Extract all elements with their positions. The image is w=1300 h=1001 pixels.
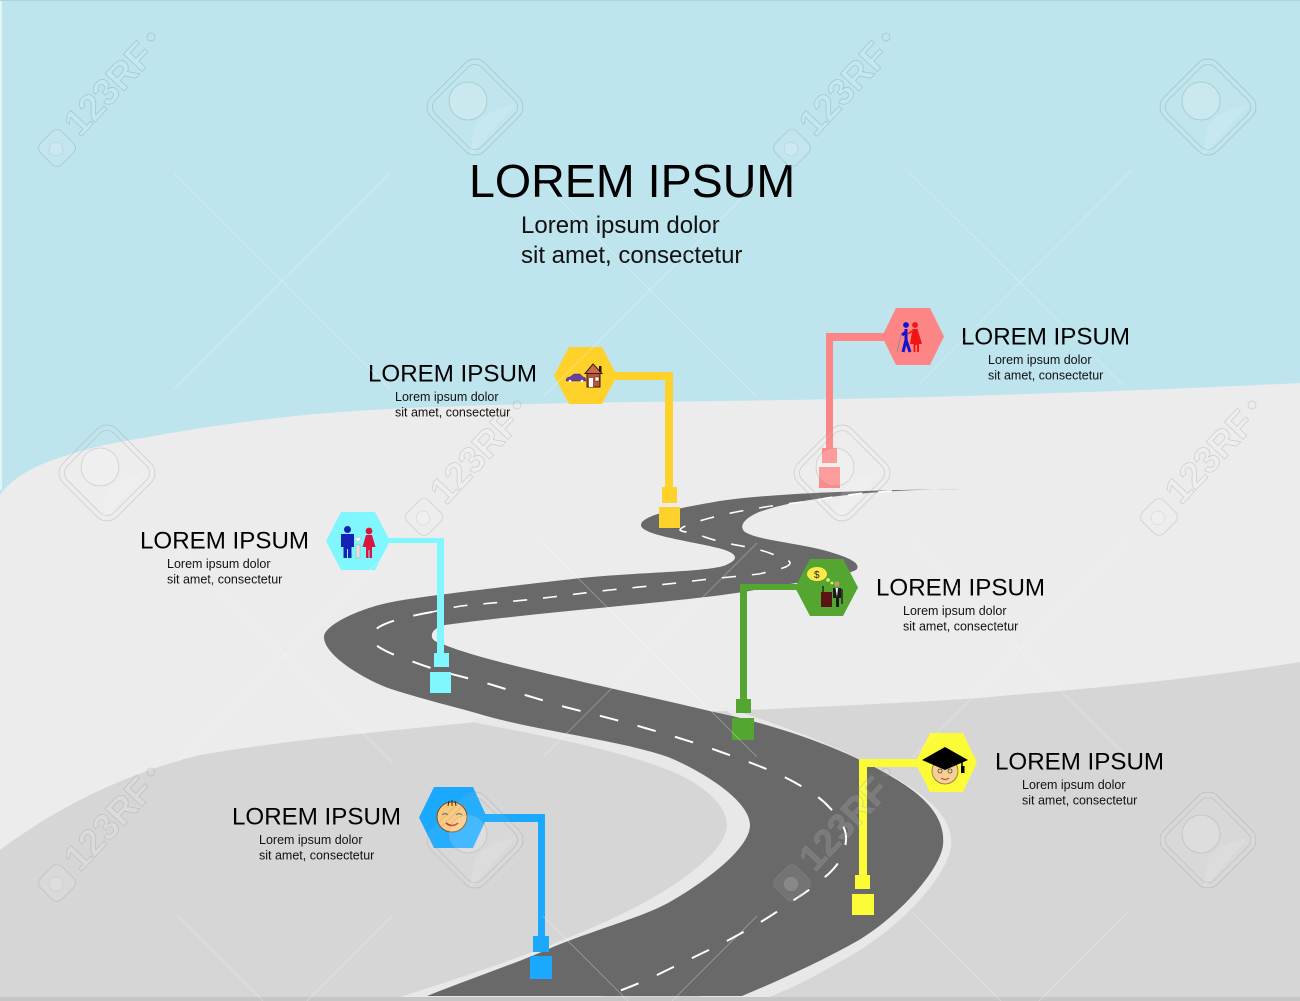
watermark: 123RF top left: 123RF	[56, 34, 162, 143]
connector	[819, 333, 890, 488]
body text: sit amet, consectetur	[259, 848, 374, 862]
watermark: 123RF middle right: 123RF	[1157, 402, 1263, 511]
watermark: 123RF top centre: 123RF	[791, 34, 897, 143]
watermark: 123RF top left	[36, 33, 162, 169]
body text: sit amet, consectetur	[167, 572, 282, 586]
road centre dashes, upper section	[432, 491, 892, 612]
step: pink elderly couple marker	[819, 308, 1130, 488]
step: golden car and house marker	[368, 347, 680, 528]
left road shoulder	[400, 715, 800, 997]
step: blue baby marker	[232, 787, 552, 979]
watermark: egg logo bottom centre	[421, 786, 529, 894]
main title: LOREM IPSUM	[469, 155, 795, 207]
left edge strip	[0, 0, 2, 490]
body text: Lorem ipsum dolor	[395, 390, 499, 404]
heading: LOREM IPSUM	[876, 574, 1045, 602]
hexagon with car and house icon	[554, 347, 617, 404]
watermark: 123RF middle right	[1138, 401, 1263, 538]
heading: LOREM IPSUM	[232, 804, 401, 830]
body text: sit amet, consectetur	[1022, 794, 1137, 808]
watermark: 123RF bottom centre: 123RF	[791, 769, 897, 878]
body text: Lorem ipsum dolor	[259, 833, 363, 847]
body text: Lorem ipsum dolor	[1022, 778, 1126, 792]
connector	[610, 372, 680, 528]
hexagon with baby icon	[419, 787, 487, 848]
right lower grey ground	[700, 662, 1300, 1001]
step: green office marker	[732, 559, 1045, 740]
watermark: 123RF top centre	[771, 33, 897, 169]
watermark: egg logo top centre	[421, 53, 529, 161]
top edge strip	[0, 0, 1300, 1]
hexagon with office worker icon: $	[814, 570, 820, 581]
step: cyan family marker	[140, 512, 451, 693]
left lower grey ground	[0, 722, 760, 1001]
watermark: egg logo middle left	[53, 419, 161, 527]
title block	[469, 155, 795, 269]
heading: LOREM IPSUM	[140, 528, 309, 554]
connector	[480, 814, 552, 979]
connector	[385, 538, 451, 693]
body text: sit amet, consectetur	[395, 406, 510, 420]
bottom edge strip	[0, 997, 1300, 1001]
subtitle: Lorem ipsum dolor	[521, 212, 720, 239]
connector	[732, 584, 805, 740]
hexagon with family icon	[326, 512, 390, 570]
body text: Lorem ipsum dolor	[167, 557, 271, 571]
body text: Lorem ipsum dolor	[903, 604, 1007, 618]
heading: LOREM IPSUM	[995, 748, 1164, 776]
heading: LOREM IPSUM	[961, 324, 1130, 350]
winding road	[324, 489, 962, 996]
body text: sit amet, consectetur	[988, 368, 1103, 382]
right road shoulder	[700, 706, 951, 997]
connector	[852, 759, 925, 915]
watermark: 123RF middle centre	[403, 401, 528, 538]
road centre dashes, lower section	[373, 612, 846, 993]
hexagon with elderly couple icon	[882, 308, 944, 365]
body text: sit amet, consectetur	[903, 620, 1018, 634]
step: yellow graduate marker	[852, 733, 1164, 915]
watermark: egg logo top right	[1154, 53, 1262, 161]
hexagon with graduate icon	[915, 733, 977, 792]
middle light grey ground	[0, 383, 1300, 1001]
body text: Lorem ipsum dolor	[988, 353, 1092, 367]
watermark: 123RF bottom left: 123RF	[56, 769, 162, 878]
watermark: egg logo bottom right	[1154, 786, 1262, 894]
watermark: egg logo middle centre	[788, 419, 896, 527]
watermark: 123RF bottom left	[36, 768, 162, 904]
watermark: 123RF bottom centre	[771, 768, 897, 904]
watermark: 123RF middle centre: 123RF	[422, 402, 528, 511]
hexagon with office worker icon	[795, 559, 858, 616]
subtitle: sit amet, consectetur	[521, 242, 742, 269]
heading: LOREM IPSUM	[368, 360, 537, 388]
